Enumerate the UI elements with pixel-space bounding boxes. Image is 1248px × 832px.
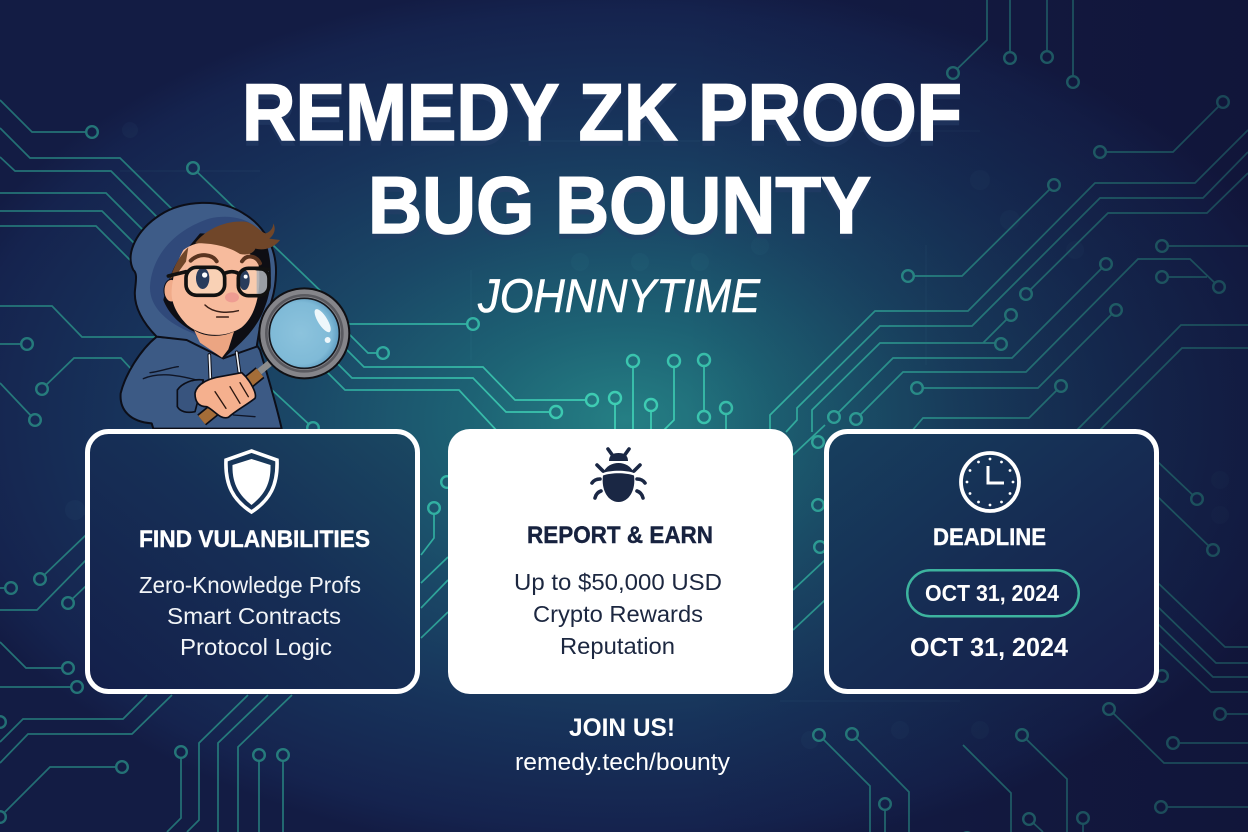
magnifier handle	[202, 373, 260, 420]
join heading: JOIN US!	[569, 714, 675, 742]
sleeve creases	[143, 367, 255, 417]
title line 2: BUG BOUNTY	[368, 161, 871, 251]
title line 1: REMEDY ZK PROOF	[242, 68, 962, 158]
panel background	[826, 432, 1156, 692]
sleeve cuff	[177, 380, 203, 412]
url: remedy.tech/bounty	[515, 749, 730, 776]
top right traces	[770, 0, 1248, 432]
title	[242, 68, 962, 251]
list item: Zero-Knowledge Profs	[139, 572, 361, 598]
right bottom traces	[819, 462, 1248, 832]
drawstrings	[209, 352, 239, 378]
panel: find vulnerabilities	[88, 432, 418, 692]
list item: Up to $50,000 USD	[514, 569, 722, 595]
left bottom traces	[0, 533, 292, 832]
mouth	[205, 305, 238, 317]
panel background	[448, 429, 793, 694]
hair	[170, 221, 280, 279]
ear	[164, 279, 179, 302]
date text: OCT 31, 2024	[910, 632, 1069, 662]
faint background texture	[65, 122, 1229, 749]
hood interior shadow	[163, 233, 271, 358]
call to action	[515, 714, 730, 776]
nose	[225, 292, 239, 302]
date pill	[907, 570, 1079, 616]
eyes	[196, 268, 209, 289]
panel background	[88, 432, 418, 692]
icon: shield	[226, 451, 277, 512]
list item: Crypto Rewards	[533, 601, 703, 627]
hood	[131, 203, 276, 358]
list item: Reputation	[560, 633, 675, 659]
panel: report and earn	[448, 429, 793, 694]
hand	[195, 373, 255, 418]
panel: deadline	[826, 432, 1156, 692]
icon: bug	[592, 449, 645, 502]
face	[172, 241, 259, 335]
panel list	[139, 572, 361, 660]
list item: Protocol Logic	[180, 634, 332, 660]
glasses lens tint	[257, 269, 269, 295]
hoodie body	[121, 337, 282, 429]
center traces	[421, 360, 825, 638]
icon: clock	[961, 453, 1019, 511]
top left traces	[0, 100, 592, 432]
list item: Smart Contracts	[167, 603, 341, 629]
glasses frame	[168, 267, 269, 296]
panel heading: DEADLINE	[933, 524, 1046, 551]
eyebrows	[191, 255, 260, 263]
panel heading: FIND VULANBILITIES	[139, 526, 370, 553]
hood inner lining	[150, 217, 270, 358]
subtitle: author name: JOHNNYTIME	[477, 269, 761, 322]
neck	[194, 330, 234, 358]
panel list	[514, 569, 722, 659]
magnifier	[259, 288, 349, 378]
mascot: hooded hacker with magnifying glass	[121, 203, 349, 429]
panel heading: REPORT & EARN	[527, 522, 713, 549]
date pill: OCT 31, 2024	[925, 580, 1059, 606]
